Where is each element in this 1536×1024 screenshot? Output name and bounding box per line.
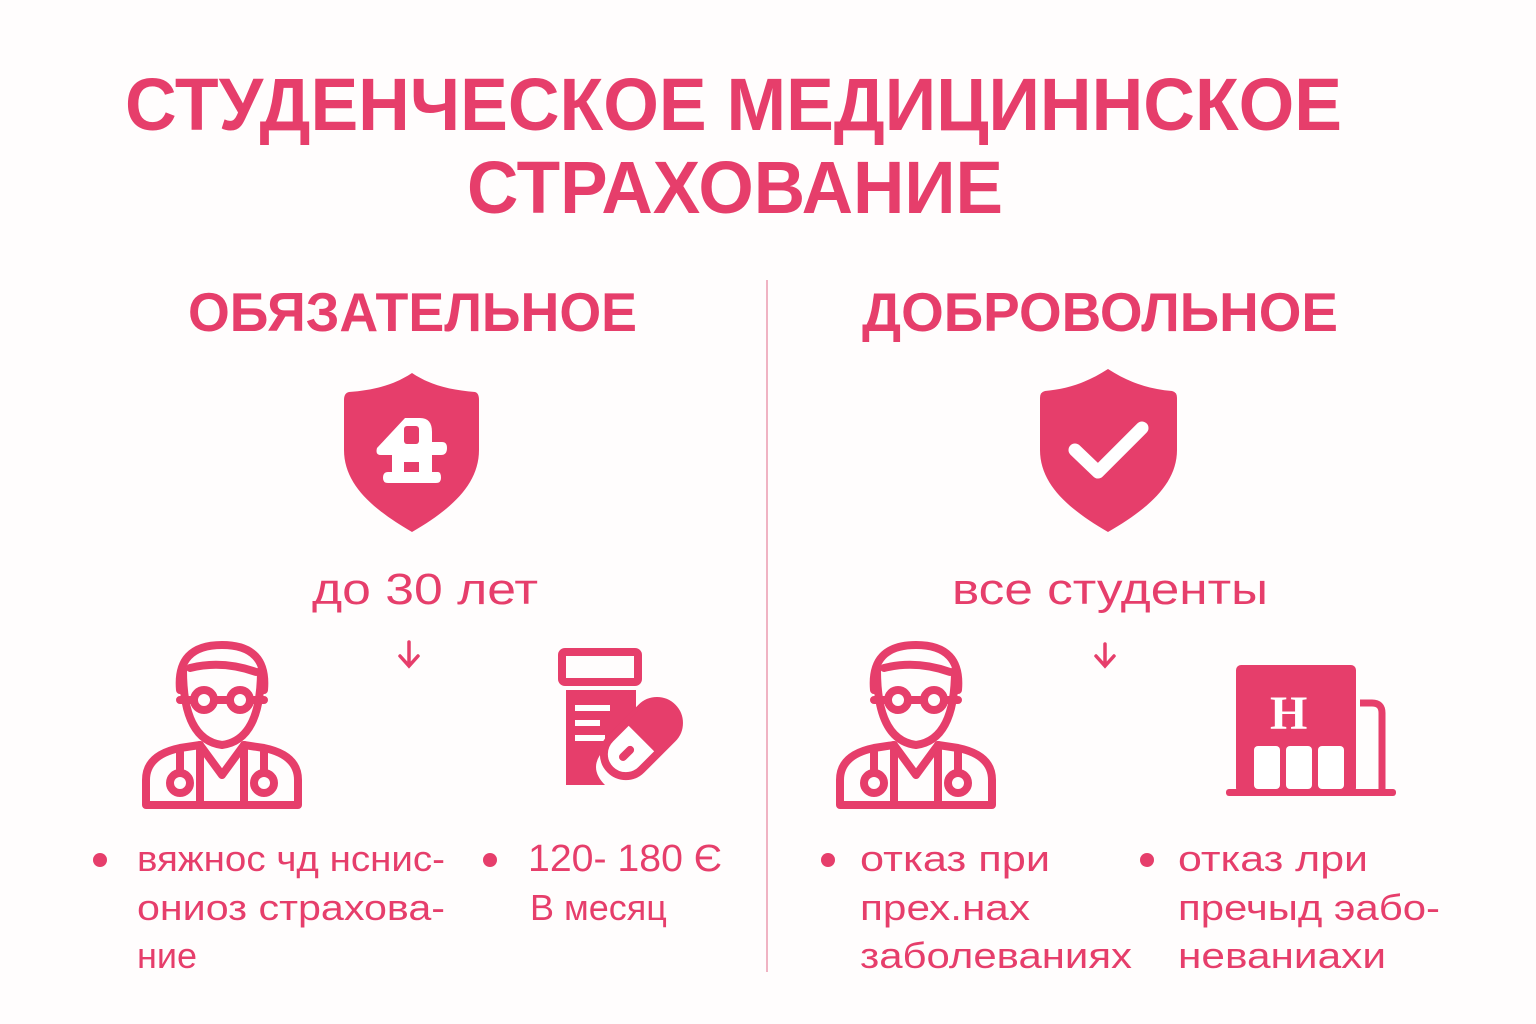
panel: mandatory — [93, 281, 722, 976]
icon: hospital: H — [1270, 687, 1307, 740]
bullet: contribution — [93, 838, 445, 976]
bullet: refusal 2 — [1140, 838, 1440, 976]
icon: pill bottle — [562, 652, 688, 785]
icon: shield with check — [1040, 369, 1177, 532]
panel: voluntary — [821, 281, 1440, 976]
arrow — [1096, 644, 1114, 666]
heading: voluntary: ДОБРОВОЛЬНОЕ — [862, 281, 1338, 343]
bullet: refusal 2: неваниахи — [1178, 935, 1386, 976]
bullet: refusal 1: отказ при — [860, 838, 1050, 879]
icon: shield with house — [344, 373, 479, 532]
bullet: refusal 2: отказ лри — [1178, 838, 1368, 879]
bullet: price — [483, 838, 722, 928]
bullet: price: 120- 180 Є — [528, 838, 722, 880]
bullet: refusal 1: заболеваниях — [860, 935, 1132, 976]
icon: doctor — [146, 645, 298, 805]
text: age: до 30 лет — [312, 565, 538, 614]
icon: doctor — [840, 645, 992, 805]
bullet: contribution: ониоз страхова- — [137, 887, 445, 928]
title — [125, 63, 1342, 229]
bullet: price: В месяц — [530, 887, 667, 928]
arrow — [400, 642, 418, 666]
bullet: contribution: вяжнос чд нснис- — [137, 838, 445, 879]
bullet: refusal 1 — [821, 838, 1132, 976]
bullet: contribution: ние — [137, 935, 197, 976]
bullet: refusal 1: прех.нах — [860, 887, 1030, 928]
title: СТУДЕНЧЕСКОЕ МЕДИЦИННСКОЕ — [125, 63, 1342, 146]
heading: mandatory: ОБЯЗАТЕЛЬНОЕ — [188, 281, 637, 343]
icon: hospital — [1226, 665, 1396, 796]
title: СТРАХОВАНИЕ — [467, 146, 1003, 229]
bullet: refusal 2: пречыд эабо- — [1178, 887, 1440, 928]
text: all students: все студенты — [952, 565, 1268, 614]
